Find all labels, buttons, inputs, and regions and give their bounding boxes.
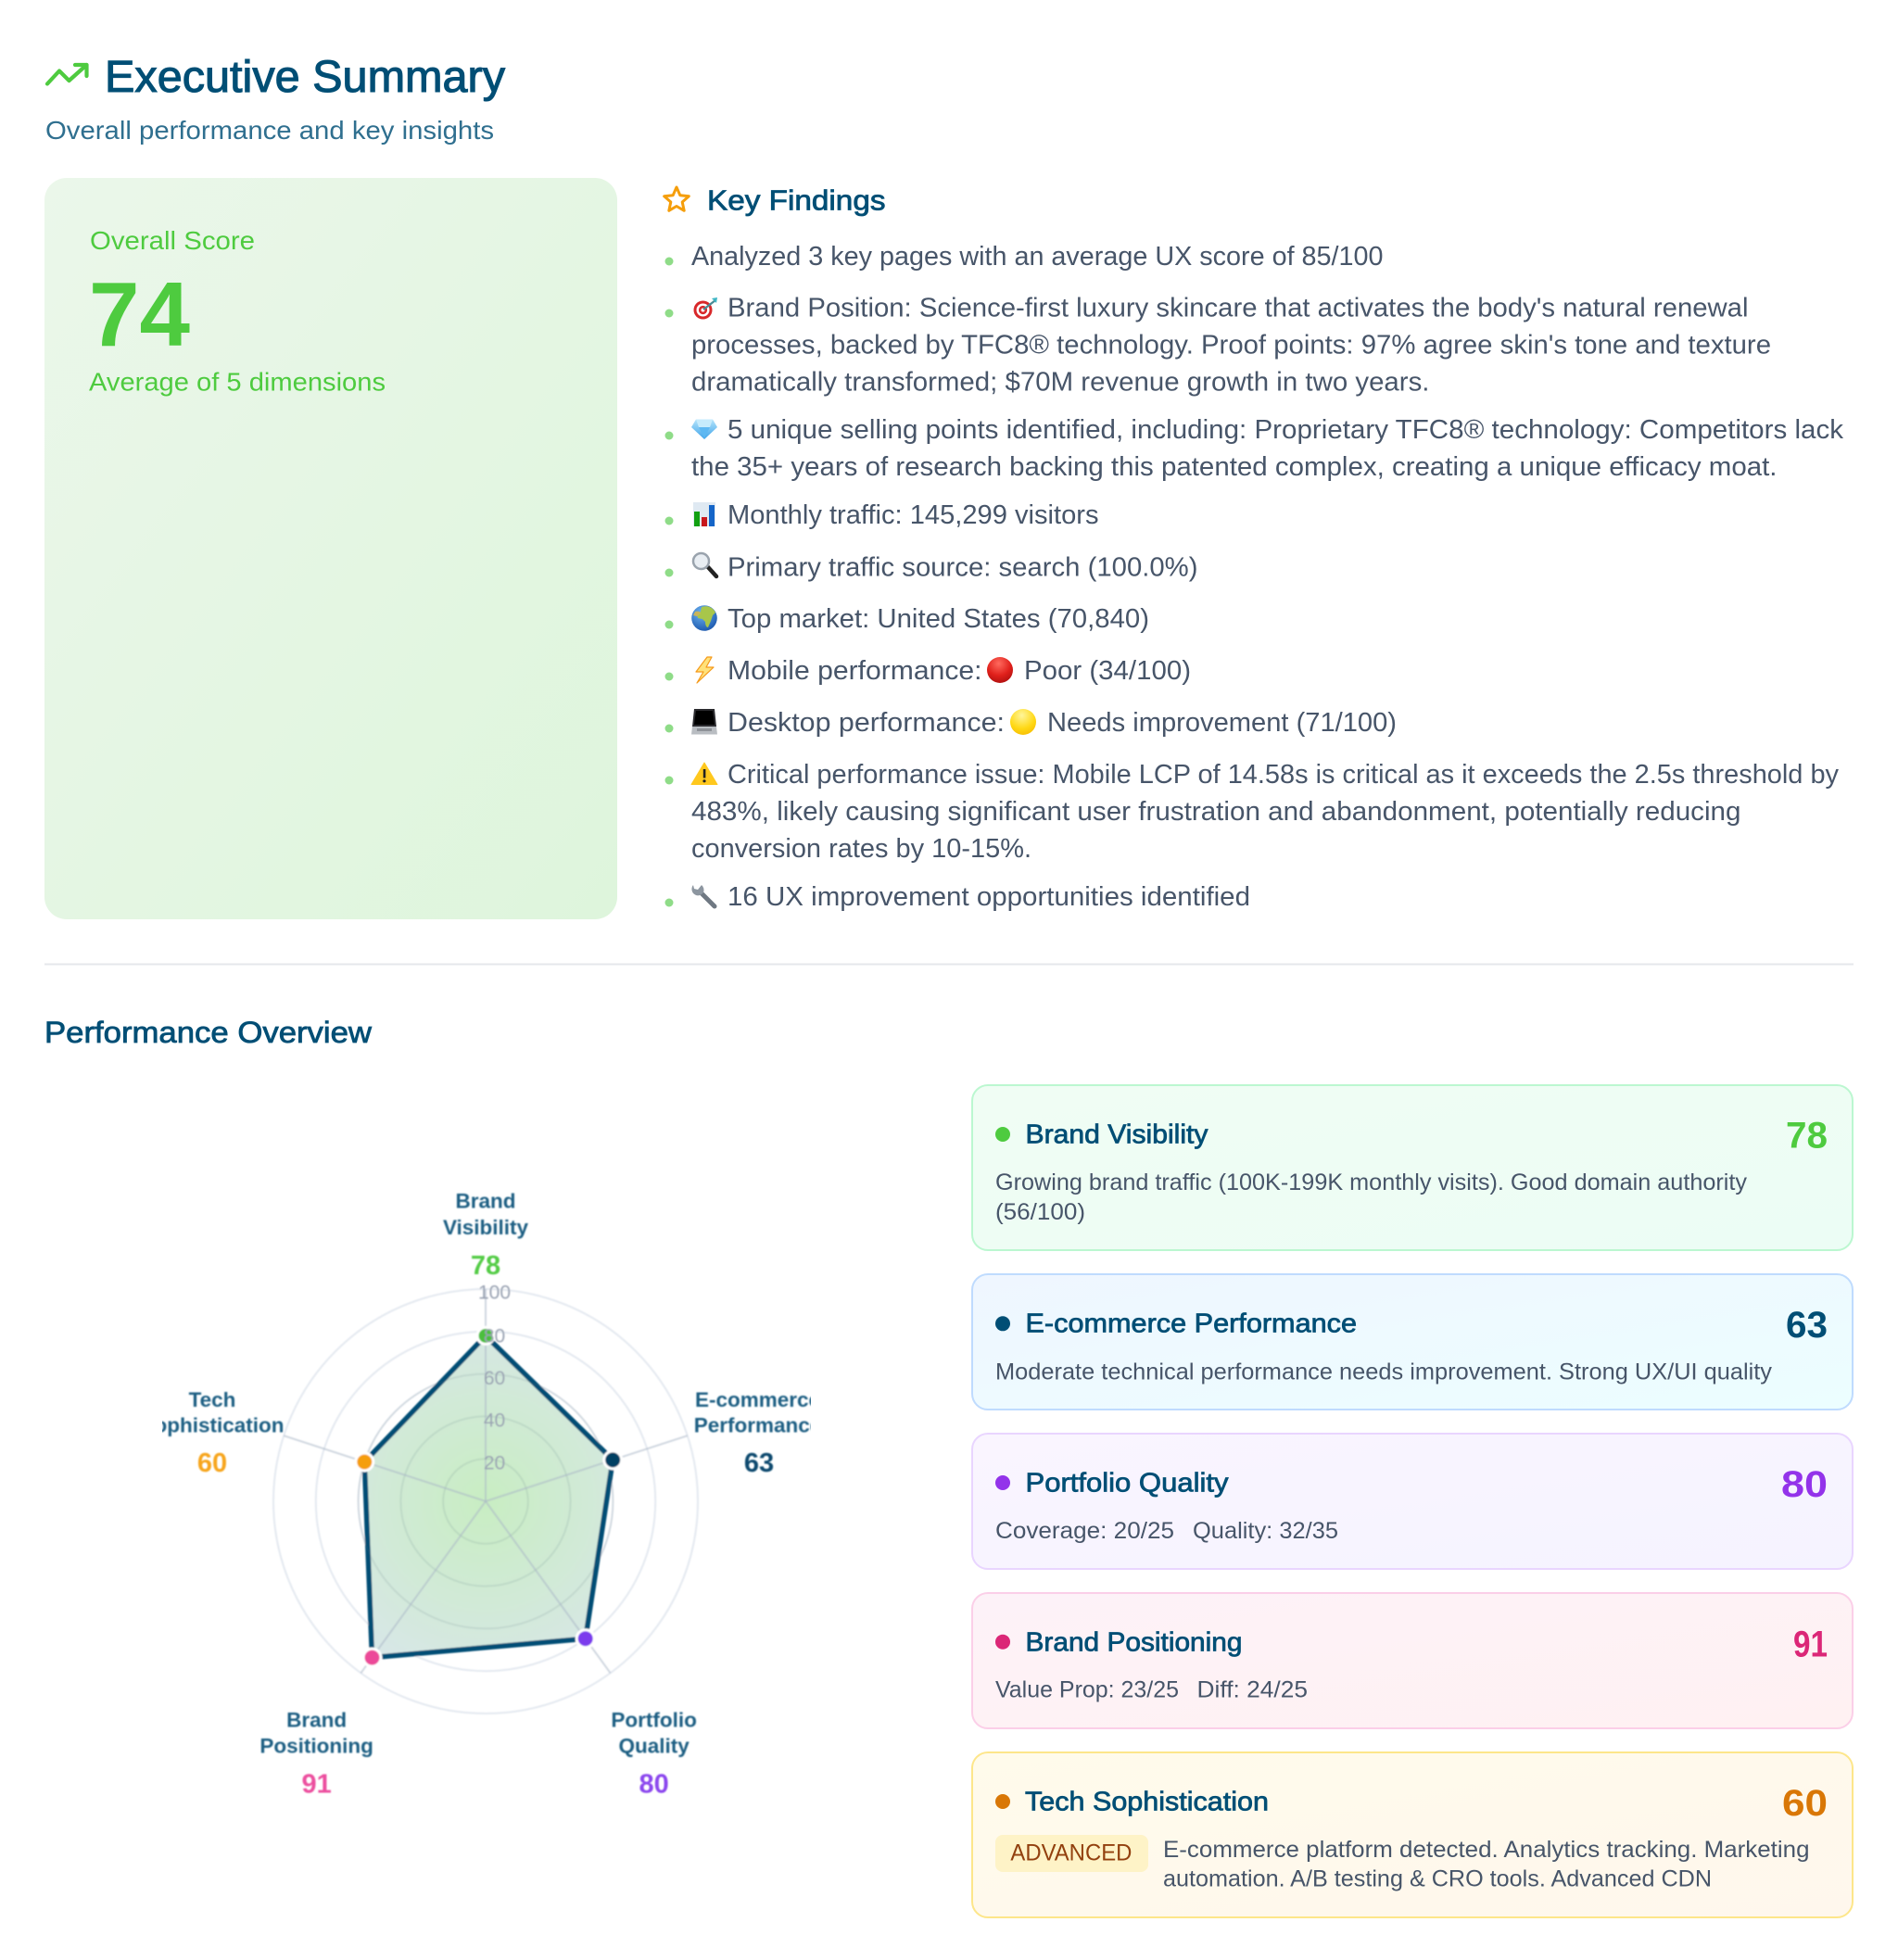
card: e-commerce performance: E-commerce Performance bbox=[1025, 1309, 1357, 1338]
finding: improvement opportunities: 16 UX improvement opportunities identified bbox=[728, 882, 1250, 912]
icon: gem emoji bbox=[691, 419, 717, 439]
heading: key findings: Key Findings bbox=[707, 185, 886, 217]
radar label: e-commerce performance: 63 bbox=[744, 1448, 774, 1478]
finding: desktop performance: Desktop performance: bbox=[728, 708, 1005, 738]
card: e-commerce performance: Moderate technical performance needs improvement. Strong UX/UI quality bbox=[995, 1359, 1773, 1385]
card: brand visibility bbox=[972, 1085, 1853, 1250]
radar label: portfolio quality: Portfolio bbox=[611, 1709, 697, 1732]
radar label: brand positioning: Positioning bbox=[259, 1735, 373, 1758]
radar label: brand visibility bbox=[443, 1190, 529, 1281]
finding: selling points bbox=[691, 415, 1844, 482]
finding: desktop performance bbox=[728, 708, 1397, 738]
panel: overall score bbox=[44, 178, 617, 919]
radar points bbox=[356, 1327, 622, 1666]
finding: critical issue: 483%, likely causing significant user frustration and abandonment, potentially reducing bbox=[691, 797, 1740, 827]
finding: brand position: dramatically transformed; $70M revenue growth in two years. bbox=[691, 368, 1429, 398]
card: tech sophistication: E-commerce platform detected. Analytics tracking. Marketing bbox=[1163, 1837, 1809, 1863]
findings list bbox=[665, 242, 1844, 912]
radar label: e-commerce performance: E-commerce bbox=[695, 1388, 820, 1411]
radar scale ticks: 100 bbox=[478, 1283, 511, 1303]
card: brand positioning: 91 bbox=[1793, 1624, 1828, 1664]
badge: advanced bbox=[995, 1835, 1148, 1872]
card: brand visibility: (56/100) bbox=[995, 1199, 1085, 1225]
card: brand positioning bbox=[972, 1593, 1853, 1728]
icon: wrench emoji bbox=[691, 885, 715, 906]
radar label: brand visibility: 78 bbox=[471, 1251, 500, 1281]
radar scale ticks: 80 bbox=[484, 1325, 505, 1347]
radar data polygon bbox=[364, 1335, 613, 1658]
radar label: tech sophistication: Sophistication bbox=[140, 1414, 285, 1437]
finding: pages analyzed: Analyzed 3 key pages with an average UX score of 85/100 bbox=[691, 242, 1383, 272]
finding: mobile performance: Poor (34/100) bbox=[1024, 656, 1191, 686]
icon: star bbox=[664, 187, 689, 210]
radar scale ticks: 60 bbox=[484, 1368, 505, 1389]
card: e-commerce performance bbox=[972, 1274, 1853, 1410]
finding: selling points: 5 unique selling points identified, including: Proprietary TFC8® technology: Competitors lack bbox=[728, 415, 1844, 445]
header bbox=[45, 53, 505, 145]
finding: brand position bbox=[691, 294, 1771, 398]
icon: warning emoji bbox=[691, 763, 717, 784]
panel: key findings bbox=[664, 185, 1844, 912]
card: portfolio quality bbox=[972, 1434, 1853, 1569]
finding: critical issue bbox=[691, 760, 1839, 864]
card: brand positioning: Brand Positioning bbox=[1025, 1628, 1242, 1658]
title: Executive Summary bbox=[105, 53, 505, 102]
radar label: portfolio quality: Quality bbox=[618, 1735, 690, 1758]
radar label: brand positioning: 91 bbox=[301, 1770, 332, 1800]
radar label: tech sophistication: 60 bbox=[197, 1448, 227, 1478]
icon: target emoji bbox=[693, 297, 717, 319]
card: portfolio quality: Coverage: 20/25 bbox=[995, 1518, 1174, 1544]
icon: lightning emoji bbox=[696, 657, 714, 683]
radar grid rings bbox=[273, 1289, 698, 1713]
radar scale ticks: 20 bbox=[484, 1453, 505, 1473]
finding: critical issue: conversion rates by 10-15%. bbox=[691, 834, 1031, 864]
radar label: brand visibility: Brand bbox=[455, 1190, 516, 1213]
icon: globe emoji bbox=[691, 605, 717, 631]
finding: top market: Top market: United States (70,840) bbox=[728, 604, 1149, 634]
card: brand positioning: Diff: 24/25 bbox=[1197, 1677, 1308, 1703]
icon: laptop emoji bbox=[691, 709, 717, 734]
radar label: e-commerce performance bbox=[694, 1388, 821, 1478]
overall score label: Overall Score bbox=[90, 226, 255, 255]
finding: mobile performance bbox=[728, 656, 1191, 686]
radar spokes bbox=[284, 1289, 688, 1673]
radar label: brand positioning bbox=[259, 1709, 373, 1800]
card: brand positioning: Value Prop: 23/25 bbox=[995, 1677, 1179, 1703]
card: tech sophistication: 60 bbox=[1782, 1783, 1828, 1824]
radar label: tech sophistication bbox=[140, 1388, 285, 1478]
icon: trending up arrow bbox=[47, 65, 87, 83]
subtitle: Overall performance and key insights bbox=[45, 116, 494, 145]
radar label: tech sophistication: Tech bbox=[189, 1388, 235, 1411]
radar scale ticks: 40 bbox=[484, 1410, 505, 1431]
overall score value: 74 bbox=[89, 263, 190, 365]
finding: brand position: Brand Position: Science-first luxury skincare that activates the body's natural renewal bbox=[728, 294, 1748, 323]
radar label: portfolio quality: 80 bbox=[639, 1770, 669, 1800]
radar label: e-commerce performance: Performance bbox=[694, 1414, 821, 1437]
radar scale ticks bbox=[478, 1283, 511, 1473]
icon: magnifier emoji bbox=[693, 553, 716, 576]
card: portfolio quality: Quality: 32/35 bbox=[1193, 1518, 1338, 1544]
card: tech sophistication: Tech Sophistication bbox=[1025, 1787, 1269, 1816]
finding: selling points: the 35+ years of research backing this patented complex, creating a unique efficacy moat. bbox=[691, 452, 1778, 482]
icon: bar chart emoji bbox=[693, 502, 715, 526]
badge: advanced: ADVANCED bbox=[1010, 1840, 1132, 1866]
card: brand visibility: Growing brand traffic (100K-199K monthly visits). Good domain authority bbox=[995, 1170, 1747, 1195]
finding: critical issue: Critical performance issue: Mobile LCP of 14.58s is critical as it exceeds the 2.5s threshold by bbox=[728, 760, 1839, 790]
card: brand visibility: 78 bbox=[1786, 1116, 1828, 1157]
card: tech sophistication: automation. A/B testing & CRO tools. Advanced CDN bbox=[1163, 1866, 1712, 1892]
finding: desktop performance: Needs improvement (71/100) bbox=[1047, 708, 1397, 738]
heading: performance overview: Performance Overview bbox=[44, 1016, 373, 1049]
finding: mobile performance: Mobile performance: bbox=[728, 656, 982, 686]
finding: monthly traffic: Monthly traffic: 145,299 visitors bbox=[728, 500, 1099, 530]
finding: brand position: processes, backed by TFC8® technology. Proof points: 97% agree skin's tone and texture bbox=[691, 331, 1771, 360]
card: portfolio quality: 80 bbox=[1781, 1464, 1828, 1505]
radar label: portfolio quality bbox=[611, 1709, 697, 1800]
card: brand visibility: Brand Visibility bbox=[1025, 1119, 1208, 1149]
card: e-commerce performance: 63 bbox=[1786, 1305, 1828, 1346]
radar label: brand positioning: Brand bbox=[286, 1709, 347, 1732]
overall score note: Average of 5 dimensions bbox=[89, 367, 386, 397]
finding: traffic source: Primary traffic source: search (100.0%) bbox=[728, 553, 1197, 583]
card: tech sophistication bbox=[972, 1752, 1853, 1917]
radar chart bbox=[140, 1190, 821, 1800]
card: portfolio quality: Portfolio Quality bbox=[1025, 1468, 1229, 1498]
radar label: brand visibility: Visibility bbox=[443, 1216, 529, 1239]
